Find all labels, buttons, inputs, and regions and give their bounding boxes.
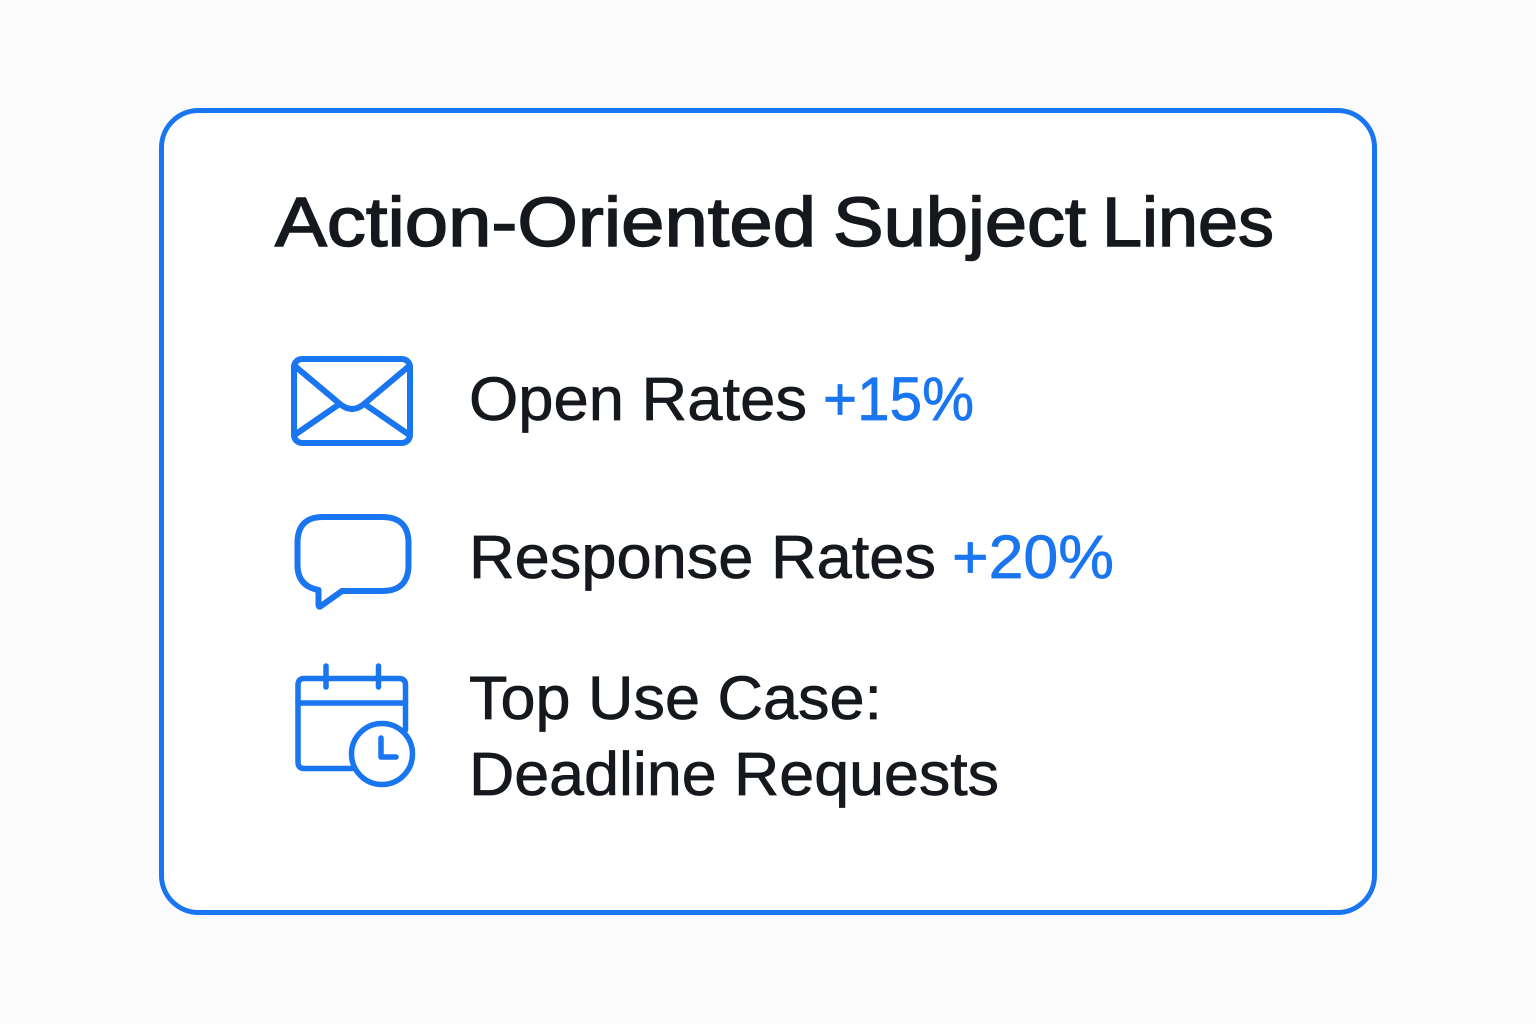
metric: open rates	[469, 365, 974, 433]
title	[275, 183, 1274, 261]
title: Action-Oriented	[275, 183, 816, 261]
text: top use case	[469, 664, 999, 808]
text: top use case: Deadline Requests	[469, 740, 999, 808]
icon: speech bubble	[298, 517, 408, 607]
title: Subject	[833, 183, 1086, 261]
icon: calendar with clock	[298, 666, 412, 784]
text: top use case: Top Use Case:	[469, 664, 882, 732]
metric: open rates: +15%	[823, 365, 974, 433]
metric: response rates: Response Rates	[469, 523, 936, 591]
panel: card	[162, 110, 1374, 912]
metric: open rates: Open Rates	[469, 365, 807, 433]
icon: envelope	[294, 359, 410, 443]
title: Lines	[1102, 183, 1274, 261]
metric: response rates: +20%	[952, 523, 1114, 591]
metric: response rates	[469, 523, 1114, 591]
